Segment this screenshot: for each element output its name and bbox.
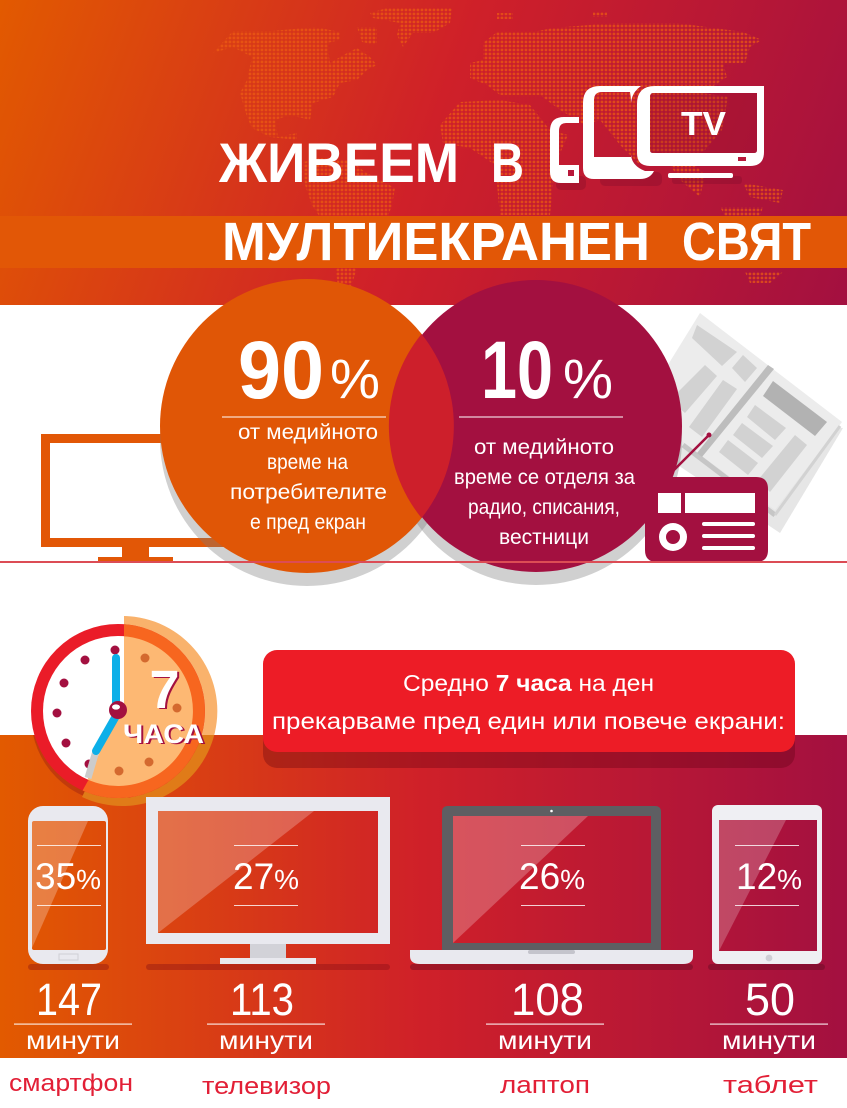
icon: screens <box>550 86 764 190</box>
stat: smartphone minutes <box>14 974 132 1055</box>
stat: 10: 10 <box>481 325 553 416</box>
panel: devices band <box>0 735 847 1058</box>
text: screen time description: е пред екран <box>250 511 366 534</box>
callout: average hours <box>263 650 795 768</box>
title band <box>0 216 847 268</box>
icon: newspaper <box>668 313 843 533</box>
icon: clock <box>31 616 217 806</box>
world map <box>213 8 783 290</box>
stat: tablet minutes: минути <box>722 1027 816 1055</box>
text: screen time description: потребителите <box>230 481 387 504</box>
stat: laptop minutes: 108 <box>511 974 584 1025</box>
stat: 26%: 26% <box>519 856 585 897</box>
stat: 90: 90 <box>238 325 324 416</box>
panel: 90 percent circle and 10 percent circle <box>160 279 682 586</box>
device: television <box>146 797 390 970</box>
stat: laptop minutes <box>486 974 604 1055</box>
icon: clock: 7 <box>149 660 180 720</box>
stat: television minutes: минути <box>219 1027 313 1055</box>
divider line <box>0 561 847 563</box>
text: other media description: от медийното <box>474 436 614 459</box>
stat: laptop minutes: минути <box>498 1027 592 1055</box>
text: часа: ЧАСА <box>125 720 206 750</box>
stat: percent sign: % <box>330 347 380 410</box>
icon: radio <box>645 432 768 562</box>
stat: smartphone minutes: 147 <box>36 974 102 1025</box>
icon: screens: TV <box>681 105 726 142</box>
text: other media description: вестници <box>499 526 589 549</box>
label: smartphone: смартфон <box>9 1070 133 1097</box>
text: other media description: време се отделя за <box>454 466 635 489</box>
text: other media description: радио, списания, <box>468 496 620 519</box>
label: tablet: таблет <box>723 1072 818 1099</box>
text: screen time description <box>230 421 387 534</box>
device: laptop <box>410 806 693 970</box>
icon: clock: ЧАСА <box>123 719 204 749</box>
icon: monitor <box>41 434 240 562</box>
label: television: телевизор <box>202 1073 331 1100</box>
stat: tablet minutes <box>710 974 828 1055</box>
stat: television minutes <box>207 974 325 1055</box>
stat: 35%: 35% <box>35 856 101 897</box>
stat: smartphone minutes: минути <box>26 1027 120 1055</box>
stat: television minutes: 113 <box>230 974 294 1025</box>
stat: 12%: 12% <box>736 856 802 897</box>
text: screen time description: от медийното <box>238 421 378 444</box>
device: smartphone <box>28 806 109 970</box>
device: tablet <box>708 805 825 970</box>
title word свят: СВЯТ <box>682 212 811 272</box>
callout line 1: Средно 7 часа на ден <box>403 670 654 696</box>
stat: percent sign: % <box>563 347 613 410</box>
title line 1: ЖИВЕЕМ <box>218 131 459 194</box>
title line 2: МУЛТИЕКРАНЕН <box>222 212 650 272</box>
callout line 2: прекарваме пред един или повече екрани: <box>272 708 785 734</box>
title word В: В <box>491 131 524 194</box>
stat: tablet minutes: 50 <box>745 974 795 1025</box>
label: laptop: лаптоп <box>500 1072 590 1099</box>
stat: 27%: 27% <box>233 856 299 897</box>
text: screen time description: време на <box>267 451 348 474</box>
panel: header <box>0 0 847 305</box>
text: other media description <box>454 436 635 549</box>
text: 7: 7 <box>151 661 182 721</box>
